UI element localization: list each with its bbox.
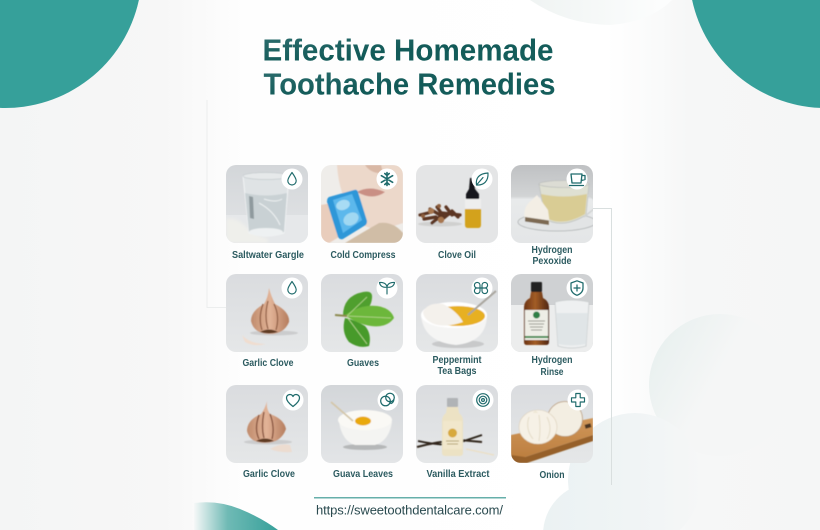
icon: leaf bbox=[472, 168, 492, 190]
photo: garlic bulb bbox=[226, 274, 308, 352]
card: Peppermint Tea Bags bbox=[416, 274, 498, 377]
title bbox=[262, 32, 556, 102]
card: Garlic Clove bbox=[226, 274, 308, 369]
photo: guava leaves bbox=[321, 274, 403, 352]
title: Effective Homemade bbox=[262, 32, 554, 68]
photo: vanilla extract bottle and pods bbox=[416, 385, 498, 463]
icon: water drop bbox=[282, 278, 302, 298]
corner circle: top left bbox=[0, 0, 139, 108]
card: Cold Compress bbox=[321, 165, 403, 261]
website link: https://sweetoothdentalcare.com/ bbox=[316, 502, 503, 518]
photo: tea cup on saucer bbox=[511, 165, 596, 243]
label line 2: Rinse bbox=[540, 367, 564, 378]
icon: shield with plus bbox=[566, 278, 588, 298]
card: Onion bbox=[511, 385, 593, 481]
icon: plus cross bbox=[568, 390, 588, 410]
icon: overlapping circles bbox=[378, 390, 398, 410]
label: Vanilla Extract bbox=[426, 469, 490, 480]
label: Hydrogen bbox=[532, 355, 572, 366]
card: Hydrogen Pexoxide bbox=[511, 165, 596, 267]
card: Hydrogen Rinse bbox=[511, 274, 593, 378]
card: Vanilla Extract bbox=[416, 385, 498, 480]
label line 2: Pexoxide bbox=[532, 256, 572, 267]
photo: onion halves on board bbox=[511, 385, 593, 463]
connector line: left bbox=[207, 100, 226, 308]
icon: tea cup bbox=[566, 168, 588, 190]
label: Guava Leaves bbox=[333, 469, 393, 480]
label: Garlic Clove bbox=[242, 358, 294, 369]
icon: snowflake bbox=[376, 168, 398, 190]
label: Peppermint bbox=[432, 355, 482, 366]
icon: sprout bbox=[376, 278, 398, 298]
label: Onion bbox=[540, 470, 564, 481]
label: Saltwater Gargle bbox=[232, 250, 304, 261]
photo: glass of salt water bbox=[226, 165, 308, 243]
top soft arc bbox=[530, 0, 672, 25]
card: Clove Oil bbox=[416, 165, 498, 261]
soft background shapes lower right bbox=[543, 314, 791, 530]
corner circle: top right bbox=[692, 0, 820, 108]
corner circle: bottom left bbox=[194, 502, 278, 530]
card: Garlic Clove (second) bbox=[226, 385, 308, 480]
label: Guaves bbox=[347, 358, 379, 369]
card: Saltwater Gargle bbox=[226, 165, 308, 261]
photo: woman with cold pack bbox=[321, 165, 403, 243]
card: Guava Leaves bbox=[321, 385, 403, 480]
label: Cold Compress bbox=[330, 250, 396, 261]
photo: garlic bulb bbox=[226, 385, 308, 463]
label line 2: Tea Bags bbox=[438, 366, 477, 377]
label: Hydrogen bbox=[532, 245, 572, 256]
connector line: right bbox=[593, 208, 612, 485]
photo: bowl of powder and honey bbox=[416, 274, 498, 352]
footer rule bbox=[314, 497, 506, 498]
icon: concentric spiral bbox=[472, 390, 494, 410]
title: Toothache Remedies bbox=[264, 66, 556, 102]
label: Garlic Clove bbox=[243, 469, 295, 480]
icon: four petals bbox=[472, 278, 492, 298]
photo: rice bowl with yolk bbox=[321, 385, 403, 463]
icon: water drop bbox=[282, 168, 302, 190]
icon: heart bbox=[282, 390, 304, 410]
card: Guaves bbox=[321, 274, 403, 369]
label: Clove Oil bbox=[438, 250, 476, 261]
photo: cloves and oil bottle bbox=[416, 165, 498, 243]
photo: amber bottle and water glass bbox=[511, 274, 593, 352]
